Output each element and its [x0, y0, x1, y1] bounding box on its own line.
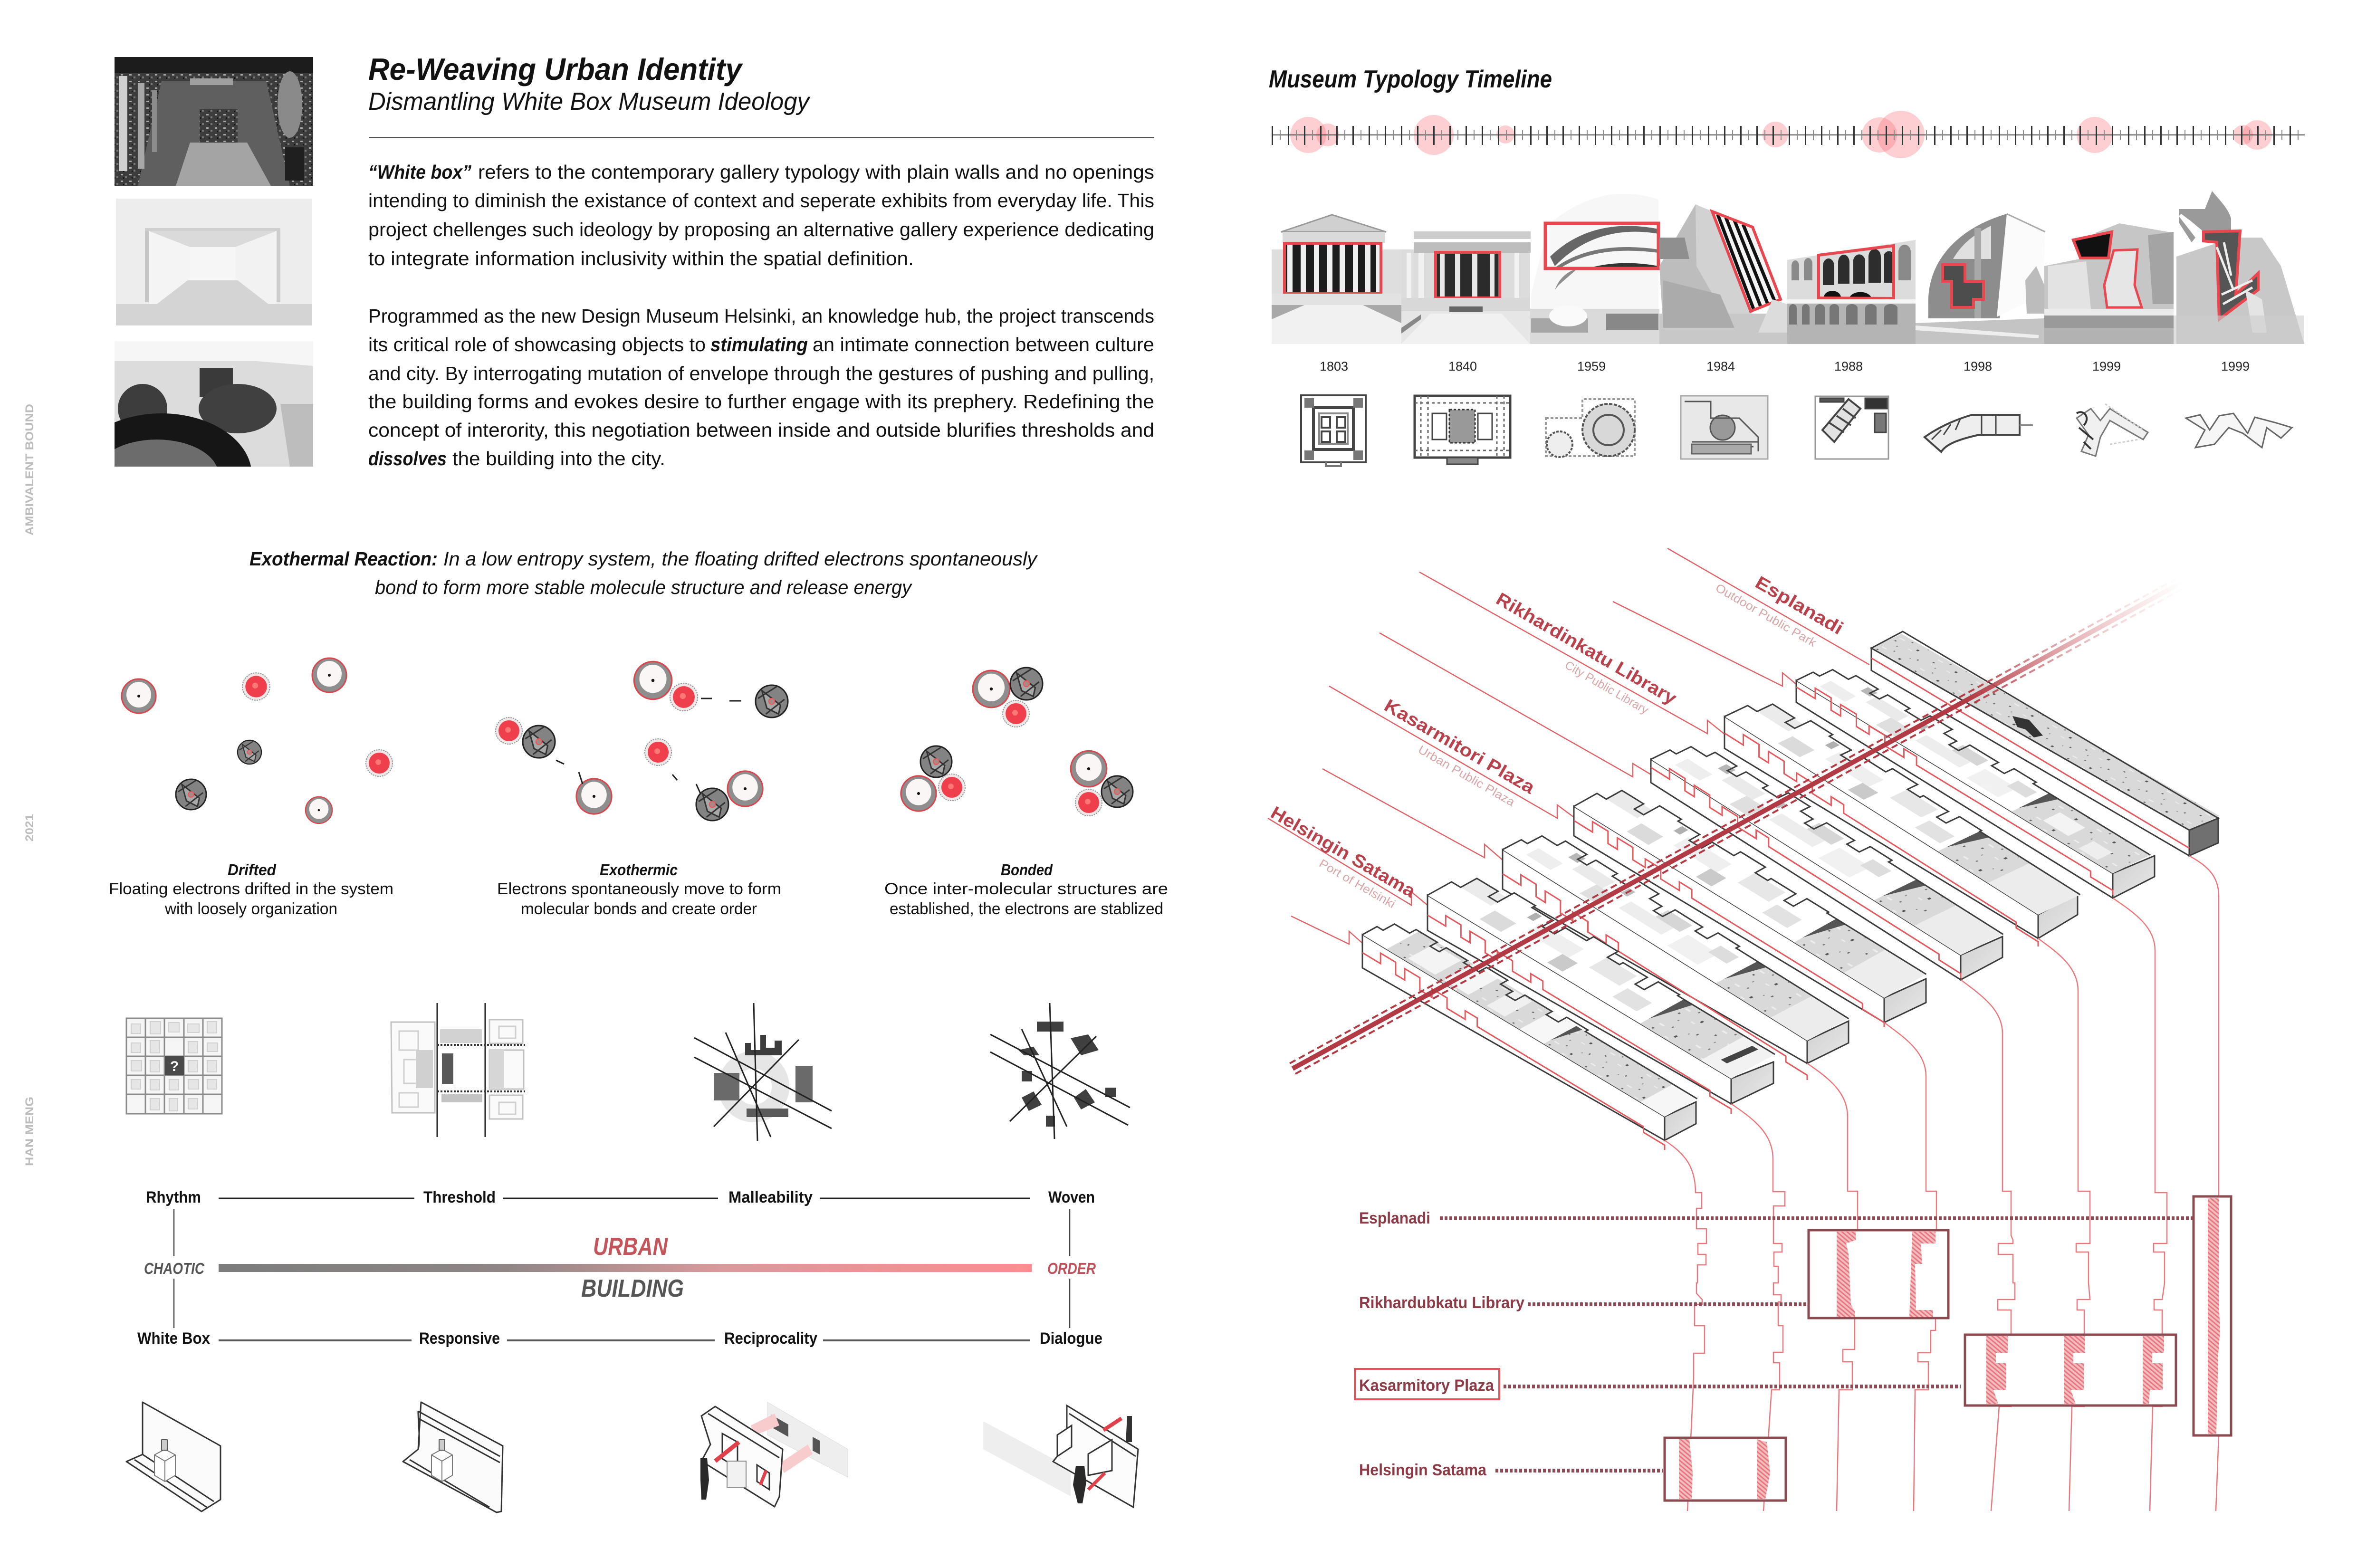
label: Rikhardinkatu Library: City Public Library — [1562, 658, 1651, 717]
caption: bonded: Once inter-molecular structures are — [884, 880, 1168, 898]
text block: design museum programme: and city. By interrogating mutation of envelope through the gestures of pushing and pulling, — [368, 363, 1154, 384]
diagram: woven — [990, 1003, 1130, 1139]
text block: design museum programme: stimulating — [710, 334, 808, 355]
label: Kasarmitori Plaza: Kasarmitori Plaza — [1380, 696, 1538, 798]
label: Helsingin Satama: Helsingin Satama — [1267, 803, 1419, 902]
year labels: 1999 — [2221, 359, 2250, 373]
spectrum labels: upper row: Rhythm — [146, 1188, 201, 1206]
spectrum bar: ORDER — [1047, 1260, 1096, 1277]
year labels: 1840 — [1448, 359, 1477, 373]
text block: exothermal reaction statement — [249, 548, 1038, 598]
building: 1998 — [1916, 214, 2045, 344]
year labels: 1803 — [1320, 359, 1348, 373]
photo: ornate gallery — [115, 57, 313, 186]
label: Kasarmitori Plaza: Urban Public Plaza — [1416, 743, 1517, 809]
wall diagram: dialogue — [983, 1405, 1138, 1507]
spectrum labels: lower row: Dialogue — [1040, 1329, 1102, 1348]
spectrum bar: URBAN — [593, 1233, 668, 1261]
caption: drifted: Drifted — [228, 861, 277, 879]
spectrum bar: CHAOTIC — [144, 1260, 205, 1277]
title rule — [369, 137, 1154, 138]
plan: 1984 — [1681, 396, 1768, 459]
text block: white box definition: refers to the contemporary gallery typology with plain walls and no openings — [478, 161, 1154, 183]
text block: design museum programme — [368, 305, 1154, 469]
plan: 1999 Bilbao — [2077, 404, 2148, 456]
section box: Helsingin Satama — [1665, 1438, 1786, 1501]
text block: exothermal reaction statement: bond to form more stable molecule structure and release energy — [375, 576, 912, 598]
spectrum labels: upper row — [146, 1188, 1095, 1206]
caption: bonded: Bonded — [1001, 861, 1053, 879]
spectrum labels: upper row: Woven — [1048, 1188, 1095, 1206]
building: 1999 Jewish Museum — [2174, 191, 2304, 344]
bar: Kasarmitori D — [1651, 736, 2008, 980]
year labels: 1959 — [1577, 359, 1606, 373]
building: 1840 — [1401, 231, 1531, 344]
label: Esplanadi: Esplanadi — [1752, 573, 1847, 639]
caption: exothermic — [497, 861, 781, 918]
diagram: malleability — [694, 1003, 832, 1141]
plan: 1999 Jewish Museum — [2186, 413, 2292, 448]
side label: left margin: HAN MENG — [23, 1097, 36, 1166]
bar: Helsingin F — [1503, 825, 1854, 1080]
spectrum labels: lower row: Responsive — [419, 1329, 500, 1348]
vertical section lines — [1665, 856, 2219, 1511]
caption: exothermic: molecular bonds and create order — [521, 900, 757, 918]
side label: left margin: AMBIVALENT BOUND — [23, 404, 36, 535]
section box: Rikhardubkatu Library — [1809, 1230, 1948, 1318]
label: Esplanadi: Outdoor Public Park — [1713, 581, 1819, 650]
text block: design museum programme: concept of interority, this negotiation between inside and outside blurifies thresholds and — [368, 419, 1154, 441]
title: Re-Weaving Urban Identity — [368, 52, 743, 86]
caption: drifted: with loosely organization — [164, 900, 337, 918]
diagram: rhythm grid — [126, 1018, 222, 1114]
leader: Rikhardubkatu Library: Rikhardubkatu Library — [1359, 1294, 1524, 1312]
section box: Kasarmitory Plaza — [1965, 1335, 2176, 1405]
spectrum labels: lower row: White Box — [137, 1329, 210, 1348]
leader: Kasarmitory Plaza: Kasarmitory Plaza — [1359, 1377, 1495, 1395]
building: 1803 — [1272, 215, 1401, 344]
text block: design museum programme: its critical role of showcasing objects to — [368, 334, 706, 355]
diagonal axis road — [1290, 577, 2185, 1074]
spectrum labels: upper row: Threshold — [423, 1188, 496, 1206]
text block: design museum programme: the building forms and evokes desire to further engage with its prephery. Redefining the — [368, 391, 1154, 412]
axonometric: urban site bars — [1267, 548, 2219, 1150]
building: 1988 — [1787, 240, 1916, 344]
bar: Helsingin G — [1428, 867, 1782, 1114]
timeline ruler with event bubbles — [1272, 111, 2305, 158]
spectrum labels: upper row: Malleability — [728, 1188, 813, 1206]
bar: Kasarmitori Plaza — [1574, 779, 1933, 1027]
molecules: drifted — [122, 658, 393, 823]
photo: white box gallery — [116, 199, 312, 325]
bar: Rikhardinkatu B — [1796, 660, 2155, 898]
year labels: 1999 — [2092, 359, 2121, 373]
label: Helsingin Satama: Port of Helsinki — [1317, 857, 1398, 911]
text block: white box definition: project chellenges such ideology by proposing an alternative gallery experience dedicating — [368, 219, 1154, 240]
plan: 1803 — [1301, 395, 1366, 466]
text block: design museum programme: an intimate connection between culture — [813, 334, 1154, 355]
plan: 1988 — [1815, 396, 1888, 459]
molecules: exothermic — [496, 661, 788, 821]
wall diagram: reciprocality — [700, 1402, 848, 1507]
side label: left margin — [23, 404, 36, 1166]
label: Esplanadi — [1713, 573, 1847, 650]
molecules: bonded — [901, 668, 1133, 816]
section box: Esplanadi — [2194, 1196, 2231, 1435]
caption: exothermic: Exothermic — [600, 861, 678, 879]
diagram: threshold plan — [391, 1003, 525, 1137]
year labels: 1998 — [1964, 359, 1992, 373]
side label: left margin: 2021 — [23, 814, 36, 841]
site lines from upper left — [1268, 548, 1869, 944]
building: 1959 — [1530, 194, 1659, 344]
leader: Kasarmitory Plaza — [1355, 1369, 1961, 1399]
year labels: 1988 — [1834, 359, 1863, 373]
text block: exothermal reaction statement: In a low entropy system, the floating drifted electrons spontaneously — [443, 548, 1038, 570]
wall diagram: responsive — [403, 1402, 503, 1512]
bar: Helsingin Satama — [1362, 915, 1701, 1150]
text block: white box definition: to integrate information inclusivity within the spatial definition. — [368, 248, 914, 269]
year labels — [1320, 359, 2250, 373]
text block: white box definition — [368, 161, 1154, 269]
text block: white box definition: “White box” — [368, 161, 471, 183]
timeline heading: Museum Typology Timeline — [1269, 66, 1552, 93]
spectrum bar: BUILDING — [581, 1275, 684, 1302]
text block: design museum programme: dissolves — [368, 448, 447, 469]
caption: bonded — [884, 861, 1168, 918]
caption: drifted — [109, 861, 393, 918]
spectrum labels: lower row — [137, 1329, 1102, 1348]
label: Rikhardinkatu Library: Rikhardinkatu Library — [1493, 589, 1680, 709]
building: 1999 Bilbao — [2044, 223, 2174, 344]
year labels: 1984 — [1706, 359, 1735, 373]
spectrum bar — [144, 1209, 1096, 1328]
caption: exothermic: Electrons spontaneously move to form — [497, 880, 781, 898]
photo: Serra sculpture hall — [71, 341, 313, 537]
caption: drifted: Floating electrons drifted in the system — [109, 880, 393, 898]
wall diagram: white box — [126, 1402, 220, 1511]
spectrum labels: lower row: Reciprocality — [724, 1329, 817, 1348]
plan: 1959 — [1546, 399, 1635, 457]
diagram: rhythm grid: ? — [170, 1059, 179, 1074]
leader: Helsingin Satama: Helsingin Satama — [1359, 1461, 1487, 1479]
plan: 1998 — [1925, 415, 2033, 452]
subtitle: Dismantling White Box Museum Ideology — [368, 88, 811, 115]
caption: bonded: established, the electrons are stablized — [890, 900, 1163, 918]
text block: design museum programme: the building into the city. — [452, 448, 665, 469]
bar: Esplanadi — [1871, 631, 2219, 856]
bar: Rikhardinkatu Library — [1725, 693, 2087, 947]
text block: exothermal reaction statement: Exothermal Reaction: — [249, 548, 438, 570]
leader: Esplanadi: Esplanadi — [1359, 1209, 1430, 1227]
text block: white box definition: intending to diminish the existance of context and seperate exhibits from everyday life. This — [368, 190, 1154, 211]
building: 1984 — [1659, 204, 1787, 344]
plan: 1840 — [1415, 396, 1510, 464]
text block: design museum programme: Programmed as the new Design Museum Helsinki, an knowledge hub, the project transcends — [368, 305, 1154, 327]
